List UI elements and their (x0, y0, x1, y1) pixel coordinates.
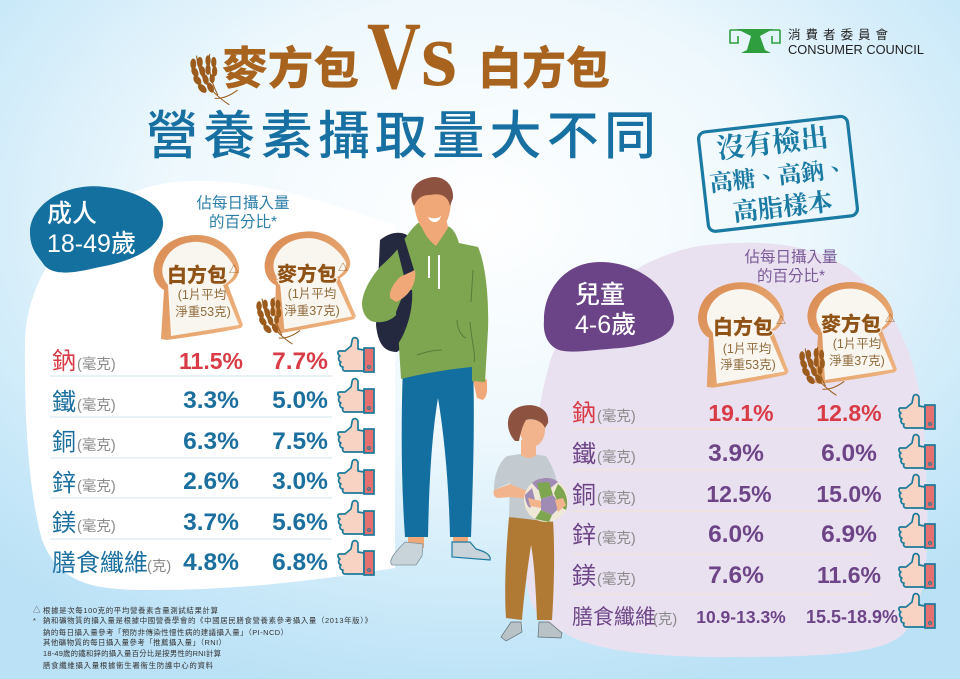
table: adult nutrients: 3.0% (272, 468, 328, 495)
table: child nutrients: 鐵(毫克) (572, 441, 636, 468)
table: child nutrients: 銅(毫克) (572, 482, 636, 509)
bread: wheat, child: (1片平均 (833, 337, 881, 351)
adult column heading: 佔每日攝入量 (196, 193, 290, 212)
bread: wheat, child (799, 282, 897, 395)
table: adult nutrients: 11.5% (179, 348, 243, 374)
footnotes: △ (33, 605, 41, 614)
table: adult nutrients: 5.0% (272, 387, 328, 414)
footnotes (33, 605, 372, 670)
bread: white, adult: 淨重53克) (175, 304, 231, 319)
bread: white, child: (1片平均 (723, 342, 771, 356)
table: child nutrients: 12.8% (816, 400, 882, 426)
bread: wheat, adult: △ (338, 262, 348, 274)
table: adult nutrients (50, 348, 332, 577)
table: child nutrients: 膳食纖維(克) (572, 606, 677, 629)
bread: wheat, adult: 麥方包 (277, 262, 337, 286)
table: adult nutrients: 7.7% (272, 348, 328, 375)
table: adult nutrients: 2.6% (183, 468, 239, 495)
panel: children (527, 243, 927, 657)
table: child nutrients: 7.6% (708, 562, 764, 589)
badge: children (544, 262, 674, 352)
icons: adult thumbs (338, 338, 374, 575)
footnotes: 根據是次每100克的平均營養素含量測試結果計算 (43, 606, 219, 615)
table: child nutrients: 12.5% (706, 481, 772, 507)
table: adult nutrients: 鎂(毫克) (52, 510, 116, 537)
table: adult nutrients: 鐵(毫克) (52, 389, 116, 416)
table: child nutrients: 3.9% (708, 440, 764, 467)
bread: white, child: 白方包 (713, 315, 773, 339)
child column heading: 的百分比* (757, 267, 825, 285)
table: child nutrients: 15.0% (816, 481, 882, 507)
badge: children: 兒童 (575, 275, 625, 311)
illustration: man (362, 177, 490, 565)
title: Vs: V (367, 2, 421, 109)
table: child nutrients: 6.0% (708, 521, 764, 548)
adult column heading: 的百分比* (209, 213, 277, 231)
title: Vs: s (421, 3, 457, 105)
footnotes: 其他礦物質的每日攝入量參考「推薦攝入量」（RNI） (43, 638, 226, 647)
table: adult nutrients: 6.3% (183, 428, 239, 455)
stamp callout: 沒有檢出 (714, 115, 830, 168)
table: child nutrients: 10.9-13.3% (696, 607, 786, 627)
logo: Consumer Council (730, 24, 924, 57)
icons: child thumbs (899, 395, 935, 628)
footnotes: 鈉和礦物質的攝入量是根據中國營養學會的《中國居民膳食營養素參考攝入量（2013年版）》 (43, 616, 372, 625)
subtitle: 營養素攝取量大不同 (146, 94, 656, 169)
logo: Consumer Council: 消費者委員會 (788, 24, 888, 43)
badge: adults (30, 186, 163, 273)
badge: adults: 成人 (47, 194, 97, 230)
table: child nutrients: 鋅(毫克) (572, 522, 636, 549)
bread: white, adult: 白方包 (167, 263, 227, 287)
badge: adults: 18-49歲 (47, 230, 136, 258)
badge: children: 4-6歲 (575, 311, 636, 339)
table: adult nutrients: 銅(毫克) (52, 429, 116, 456)
logo: Consumer Council: CONSUMER COUNCIL (788, 42, 924, 57)
bread: white, adult (153, 235, 243, 340)
bread: white, child: △ (776, 315, 786, 327)
table: adult nutrients: 3.3% (183, 387, 239, 414)
title: wheat icon (190, 54, 238, 105)
table: child nutrients: 11.6% (817, 562, 881, 588)
bread: wheat, adult: (1片平均 (288, 287, 336, 301)
bread: white, child: 淨重53克) (720, 357, 776, 372)
table: adult nutrients: 5.6% (272, 509, 328, 536)
table: child nutrients: 6.0% (821, 440, 877, 467)
bread: white, child (697, 281, 789, 388)
table: child nutrients: 鎂(毫克) (572, 563, 636, 590)
table: adult nutrients: 7.5% (272, 428, 328, 455)
child column heading: 佔每日攝入量 (744, 247, 838, 266)
footnotes: 膳食纖維攝入量根據衞生署衞生防護中心的資料 (43, 661, 214, 670)
table: adult nutrients: 鈉(毫克) (52, 348, 116, 375)
panel: adults (25, 181, 395, 590)
child column heading (744, 247, 838, 285)
footnotes: 18-49歲的鐵和鋅的攝入量百分比是按男性的RNI計算 (43, 649, 222, 658)
table: adult nutrients: 4.8% (183, 549, 239, 576)
stamp callout: 高脂樣本 (731, 182, 834, 229)
table: adult nutrients: 3.7% (183, 509, 239, 536)
adult column heading (196, 193, 290, 231)
table: child nutrients: 6.9% (821, 521, 877, 548)
table: child nutrients (572, 400, 898, 629)
table: child nutrients: 鈉(毫克) (572, 400, 636, 427)
table: adult nutrients: 膳食纖維(克) (52, 550, 171, 577)
bread: white, adult: (1片平均 (178, 288, 226, 302)
illustration: boy (493, 405, 568, 641)
table: child nutrients: 19.1% (708, 400, 774, 426)
title: white bread: 白方包 (478, 32, 610, 97)
bread: wheat, child: 淨重37克) (829, 353, 885, 368)
title: wheat bread: 麥方包 (222, 32, 359, 97)
table: child nutrients: 15.5-18.9% (806, 607, 898, 627)
bread: wheat, adult (256, 230, 356, 344)
footnotes: * (33, 616, 36, 625)
table: adult nutrients: 鋅(毫克) (52, 470, 116, 497)
table: adult nutrients: 6.8% (272, 549, 328, 576)
bread: wheat, child: 麥方包 (821, 312, 881, 336)
footnotes: 鈉的每日攝入量參考「預防非傳染性慢性病的建議攝入量」（PI-NCD） (43, 628, 288, 637)
stamp callout (697, 113, 858, 232)
bread: wheat, adult: 淨重37克) (284, 303, 340, 318)
bread: wheat, child: △ (885, 313, 895, 325)
stamp callout: 高糖、高鈉、 (708, 150, 848, 199)
bread: white, adult: △ (229, 264, 239, 276)
